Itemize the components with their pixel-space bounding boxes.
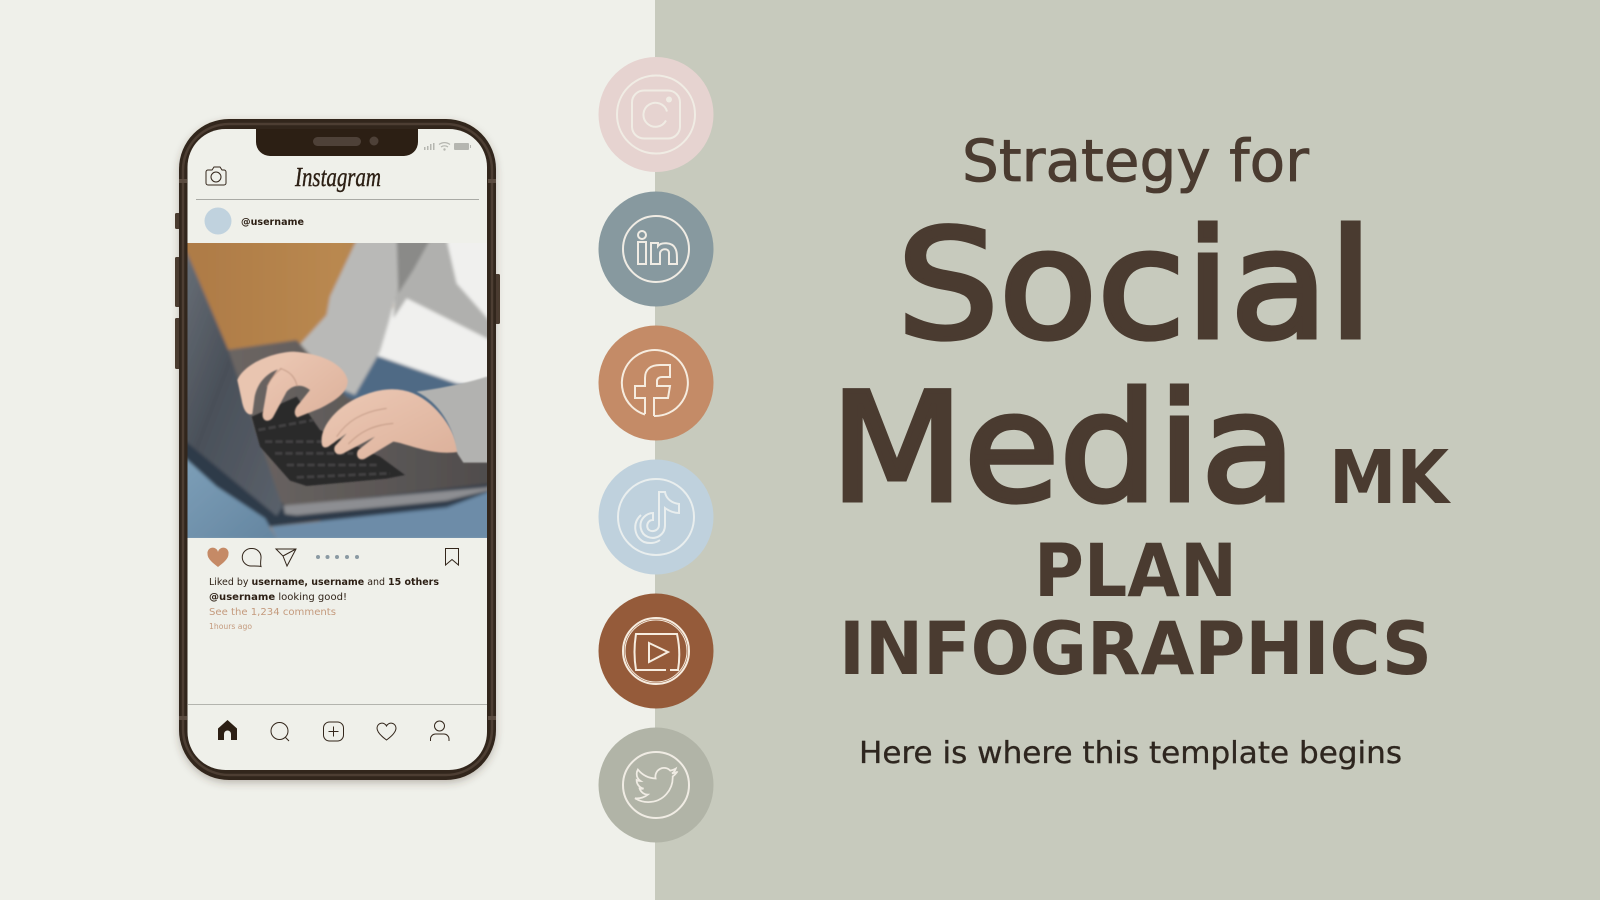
phone body [179,119,496,780]
phone mockup [175,119,500,780]
likes line: Liked by username, username and 15 others [209,577,439,588]
nav icon: home [218,720,237,740]
Instagram logo text: Instagram [294,162,381,192]
title line: PLAN: PLAN [1034,529,1237,614]
title line: Strategy for: Strategy for [962,127,1309,195]
icon: facebook [598,326,714,440]
icon: youtube [598,594,714,708]
header divider [196,199,479,200]
caption text [209,577,439,631]
phone side buttons [175,213,500,369]
notch [256,129,418,156]
icon: twitter [598,728,714,842]
scene base [188,243,394,536]
subtitle: Here is where this template begins [859,736,1402,771]
nav icon: add [324,722,344,741]
title line: Social: Social [897,199,1373,373]
pagination dots [316,555,359,559]
nav divider [188,704,487,705]
left background panel [0,0,655,900]
title line: MK: MK [1329,435,1451,521]
share icon [276,549,296,566]
icon: instagram [598,57,714,172]
title block [830,127,1451,692]
user avatar [204,208,232,234]
right background panel [655,0,1600,900]
keyboard [252,397,405,486]
bookmark icon [446,548,458,565]
nav icon: search [271,722,289,741]
photo: hands typing on laptop [180,240,493,540]
sweater cuff [417,377,493,463]
status icons [424,143,471,151]
see comments link: See the 1,234 comments [209,607,336,618]
comment line: @username looking good! [209,592,347,603]
hands [237,352,459,459]
nav icon: profile [430,721,449,741]
username: @username [241,217,304,228]
like icon [207,548,229,567]
icon: tiktok [598,460,714,574]
comment icon [242,548,261,566]
camera icon [206,167,226,185]
icon: linkedin [598,192,714,306]
title line: Media: Media [830,362,1296,536]
nav icon: heart [377,723,396,740]
timestamp: 1hours ago [209,622,252,631]
title line: INFOGRAPHICS: INFOGRAPHICS [839,607,1432,692]
